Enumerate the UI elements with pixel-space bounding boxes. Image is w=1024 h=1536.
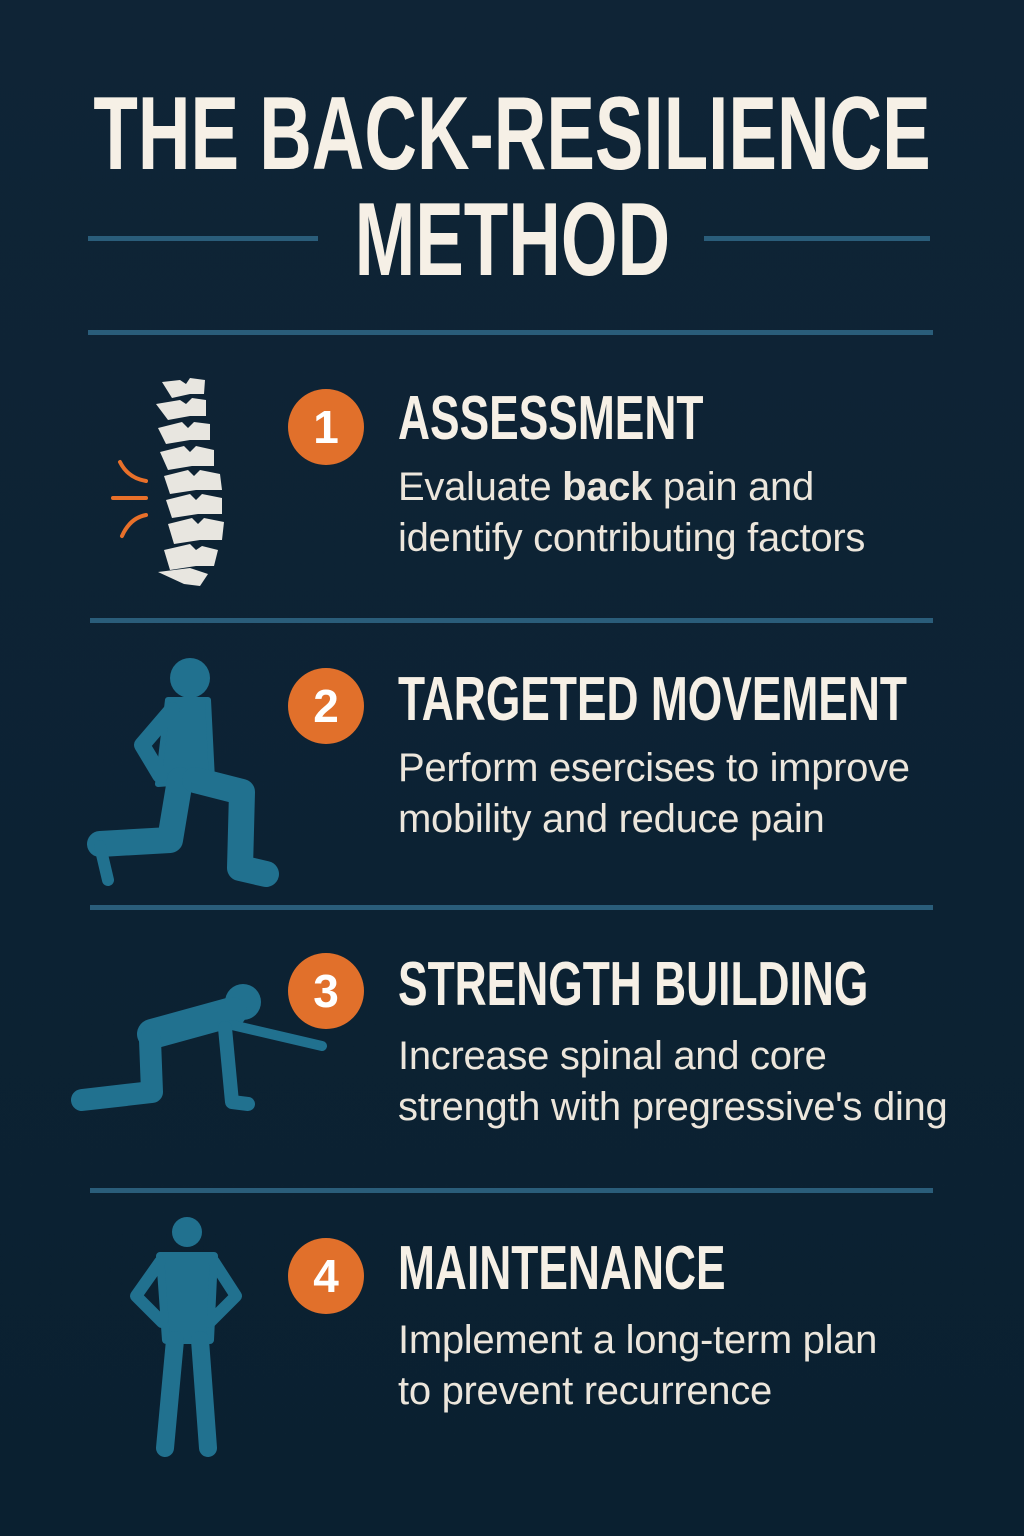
heading 1: ASSESSMENT [398, 384, 703, 453]
title line 2: METHOD [354, 182, 670, 298]
badge 2: 2 [313, 680, 339, 732]
text 1 [398, 465, 865, 560]
icon: lunge figure [87, 658, 279, 887]
badge 1: 1 [313, 401, 339, 453]
badge 4: 4 [313, 1250, 339, 1302]
icon: standing figure [130, 1217, 242, 1457]
heading 3: STRENGTH BUILDING [398, 950, 868, 1019]
icon: bird-dog figure [71, 984, 327, 1111]
text 2: Perform esercises to improve [398, 746, 910, 790]
text 2: mobility and reduce pain [398, 797, 824, 841]
icon: spine with pain lines [111, 378, 224, 586]
badge 2 [288, 668, 364, 744]
badge 3: 3 [313, 965, 339, 1017]
text 3 [398, 1034, 947, 1129]
text 2 [398, 746, 910, 841]
text 4 [398, 1318, 877, 1413]
text 3: strength with pregressive's ding [398, 1085, 947, 1129]
text 1: identify contributing factors [398, 516, 865, 560]
text 4: Implement a long-term plan [398, 1318, 877, 1362]
text 1: Evaluate back pain and [398, 465, 814, 509]
badge 1 [288, 389, 364, 465]
badge 4 [288, 1238, 364, 1314]
text 3: Increase spinal and core [398, 1034, 827, 1078]
text 4: to prevent recurrence [398, 1369, 772, 1413]
title: THE BACK-RESILIENCE [93, 76, 931, 192]
heading 4: MAINTENANCE [398, 1234, 726, 1303]
heading 2: TARGETED MOVEMENT [398, 665, 907, 734]
badge 3 [288, 953, 364, 1029]
